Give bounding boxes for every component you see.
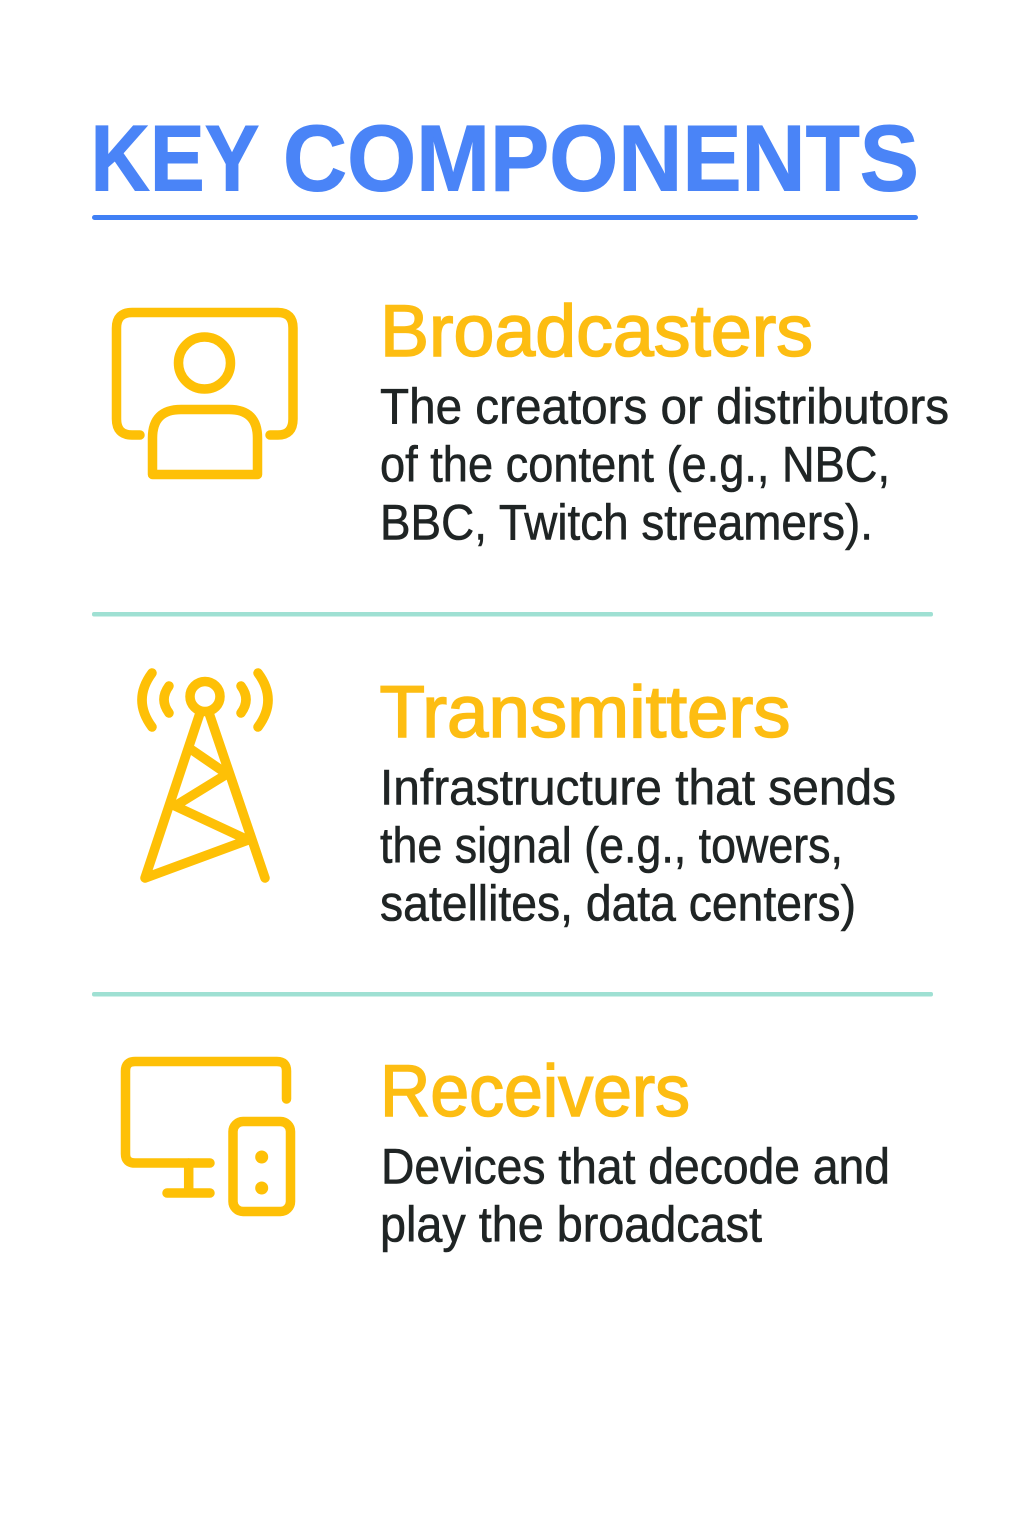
heading: transmitters: Transmitters (380, 672, 790, 753)
title: KEY (90, 106, 260, 210)
panel: transmitters (142, 672, 896, 932)
icon: person on screen (116, 312, 293, 474)
text: broadcasters description (380, 378, 949, 550)
text: receivers description: Devices that decode and (381, 1138, 890, 1194)
text: transmitters description (380, 760, 896, 932)
text: transmitters description: the signal (e.g., towers, (380, 818, 843, 874)
text: broadcasters description: BBC, Twitch streamers). (380, 494, 873, 550)
heading: broadcasters: Broadcasters (380, 291, 813, 372)
text: receivers description (380, 1138, 890, 1252)
icon: monitor and phone (126, 1062, 290, 1212)
heading: receivers: Receivers (380, 1051, 690, 1132)
panel: broadcasters (116, 291, 949, 550)
icon: transmission tower (142, 673, 268, 878)
text: transmitters description: satellites, data centers) (380, 876, 856, 932)
title (90, 106, 919, 220)
title: COMPONENTS (283, 106, 919, 210)
panel: receivers (126, 1051, 890, 1252)
text: receivers description: play the broadcast (380, 1196, 762, 1252)
text: broadcasters description: The creators or distributors (380, 378, 949, 434)
text: broadcasters description: of the content (e.g., NBC, (380, 436, 890, 492)
text: transmitters description: Infrastructure that sends (380, 760, 896, 816)
